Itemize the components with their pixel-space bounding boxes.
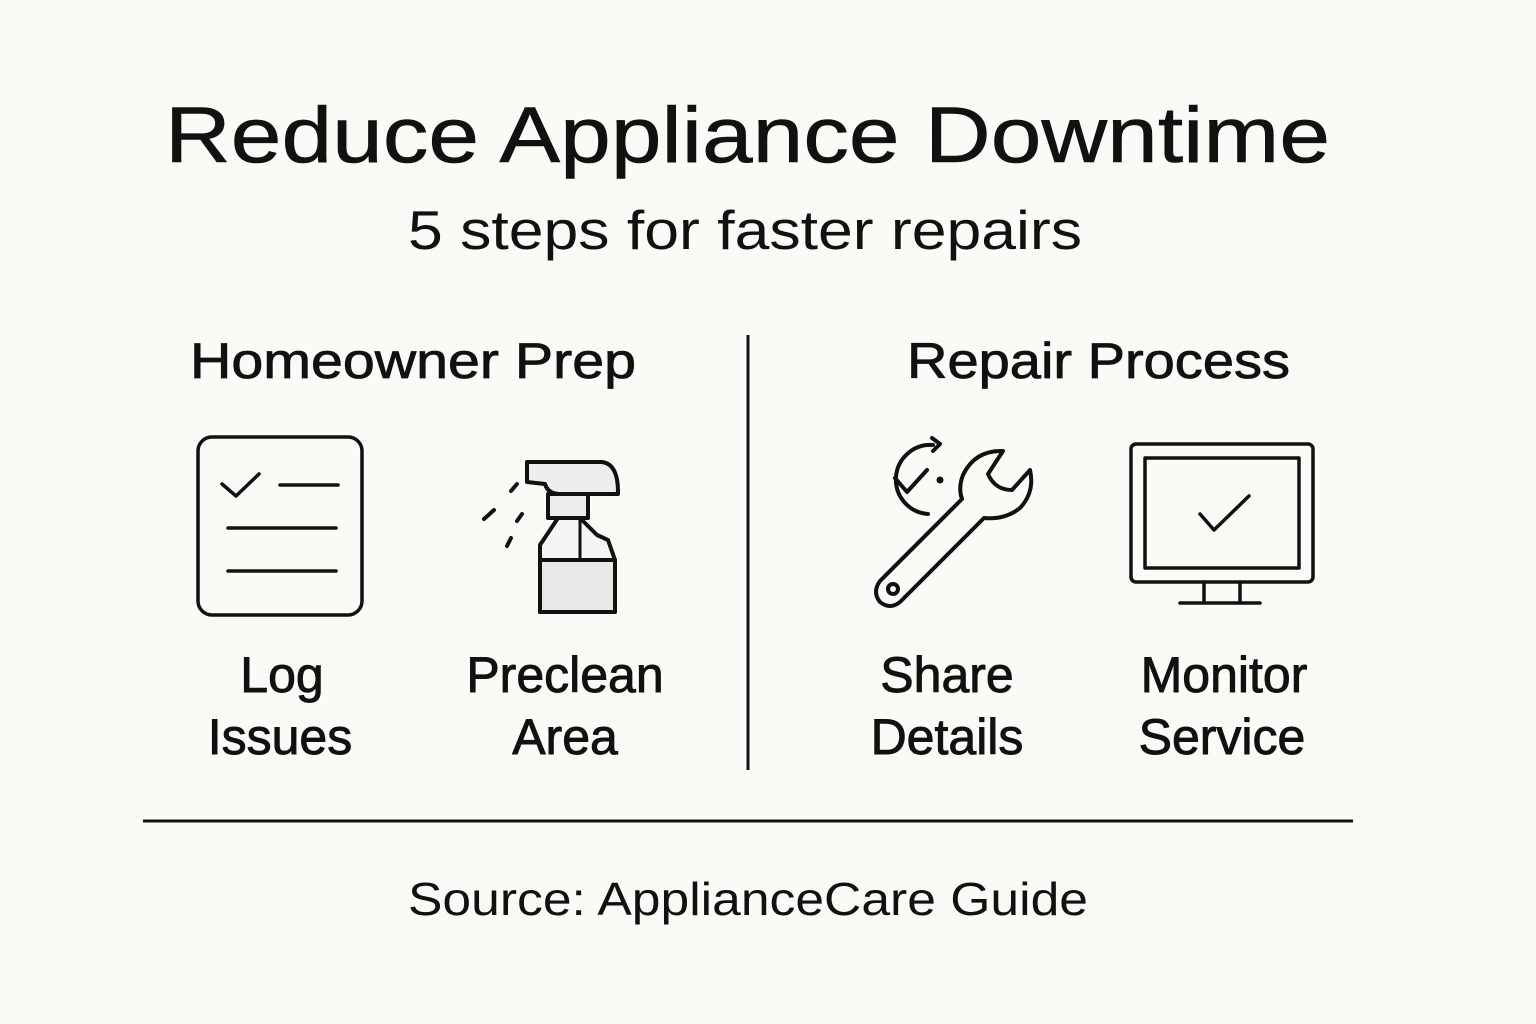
icon: wrench with check — [876, 438, 1031, 606]
label: Monitor Service: Monitor — [1141, 647, 1307, 703]
label: Preclean Area — [466, 647, 664, 765]
title: Reduce Appliance Downtime — [165, 90, 1330, 179]
subtitle: 5 steps for faster repairs — [408, 199, 1082, 261]
source text: Source: ApplianceCare Guide — [408, 873, 1088, 925]
icon: spray bottle — [484, 462, 618, 612]
label: Share Details: Details — [871, 709, 1023, 765]
heading: Homeowner Prep: Homeowner Prep — [190, 333, 636, 389]
label: Monitor Service: Service — [1139, 709, 1305, 765]
label: Preclean Area: Preclean — [466, 647, 664, 703]
label: Log Issues: Issues — [208, 709, 352, 765]
label: Monitor Service — [1139, 647, 1307, 765]
label: Log Issues: Log — [240, 647, 324, 703]
label: Share Details — [871, 647, 1023, 765]
label: Log Issues — [208, 647, 352, 765]
label: Preclean Area: Area — [512, 709, 618, 765]
heading: Repair Process: Repair Process — [907, 333, 1290, 389]
label: Share Details: Share — [880, 647, 1014, 703]
icon: monitor — [1131, 444, 1313, 603]
icon: checklist — [198, 437, 362, 615]
